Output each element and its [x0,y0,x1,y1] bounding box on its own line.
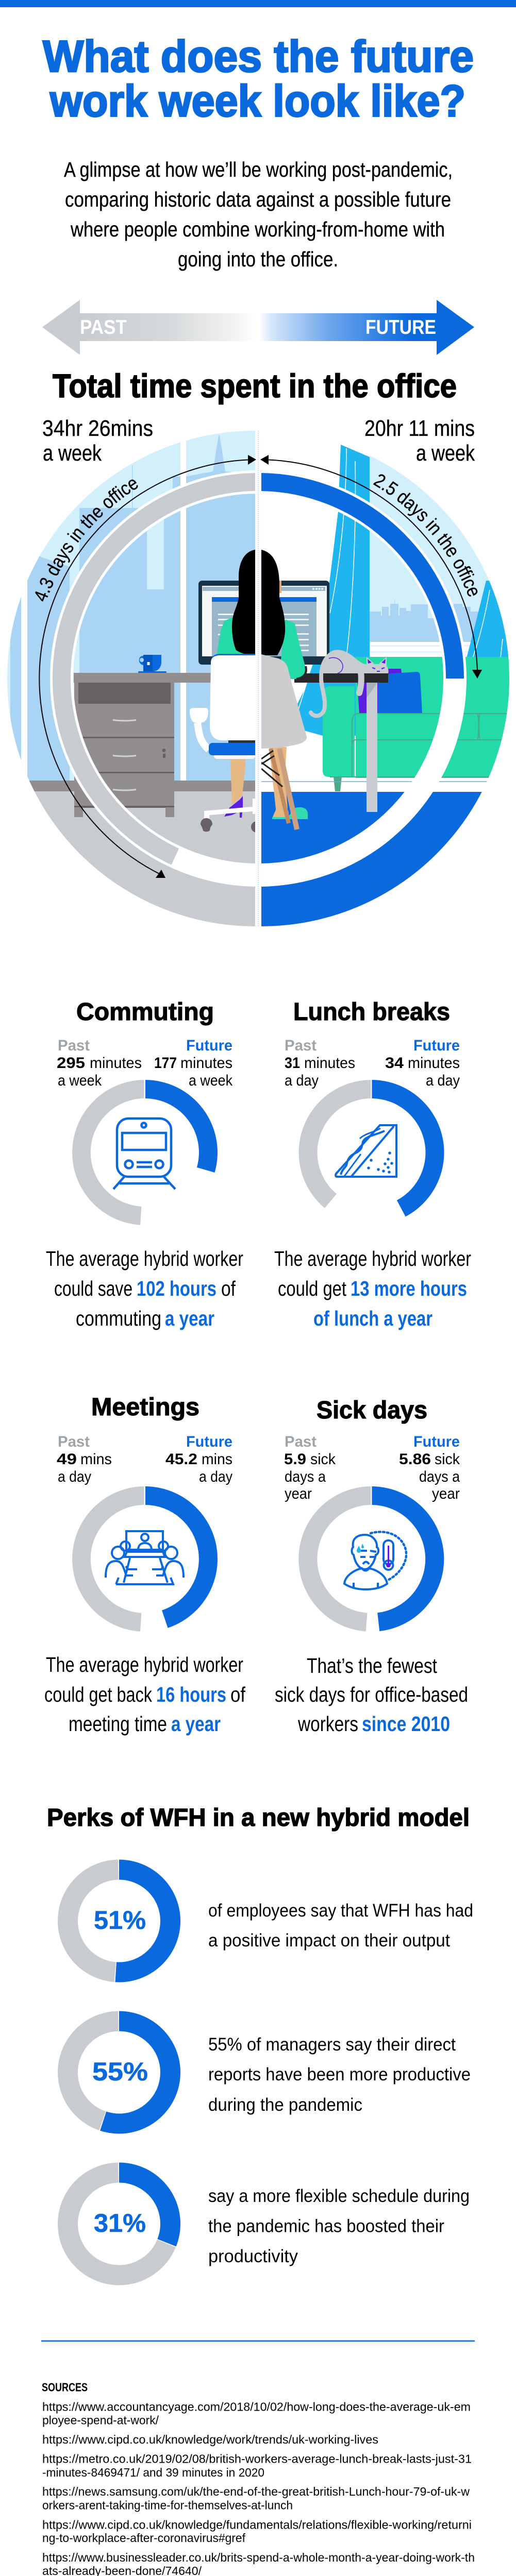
source links: https://www.cipd.co.uk/knowledge/work/trends/uk-working-lives [42,2433,378,2446]
future stat [165,1433,232,1485]
timeline arrow: past to future [42,300,474,355]
progress ring: future, 2.5 days [258,482,455,679]
past stat: a week [58,1072,102,1089]
source links: https://www.businessleader.co.uk/brits-spend-a-whole-month-a-year-doing-work-th [42,2551,475,2564]
label: future hours: 20hr 11 mins [364,416,475,441]
past stat: minutes [304,1055,355,1072]
panel: sick days [275,1397,468,1736]
past stat: a day [285,1072,319,1089]
hair [232,550,255,655]
body text: The average hybrid worker [46,1247,243,1270]
top bar [0,0,516,7]
past stat: a day [58,1468,91,1485]
donut [68,2173,170,2275]
perk: 51% [68,1870,473,1972]
arrow: past arc [39,455,256,878]
body text [44,1653,246,1736]
sources [42,2380,475,2576]
past stat: mins [80,1451,112,1468]
intro text: comparing historic data against a possible future [65,188,451,211]
future stat: minutes [180,1055,232,1072]
future stat [154,1037,233,1089]
description: reports have been more productive [208,2064,471,2084]
future stat: year [432,1485,460,1502]
past stat [285,1037,355,1089]
body text: a year [165,1307,214,1330]
body text: of [230,1683,246,1706]
sleeping cat [311,650,389,716]
sources heading: SOURCES [42,2380,88,2394]
arc label: 2.5 days: 2.5 days in the office [373,474,477,597]
body text: 16 hours [156,1683,226,1706]
arrow: future arc [260,455,482,679]
body text: That’s the fewest [307,1654,437,1677]
rug and floor [261,781,487,926]
body text [275,1654,468,1736]
desk top [74,673,218,683]
past stat: Past [285,1433,317,1450]
label: past hours [42,416,153,466]
heading: Sick days [317,1397,427,1424]
timeline arrow: past to future: FUTURE [365,316,436,338]
source links: https://metro.co.uk/2019/02/08/british-workers-average-lunch-break-lasts-just-31 [42,2452,472,2466]
future stat: mins [202,1451,232,1468]
past stat: Past [58,1433,90,1450]
illustration: home half (future) [258,428,516,933]
future stat: 45.2 [165,1451,197,1468]
perk: 31% [68,2173,470,2275]
intro text: going into the office. [178,247,338,271]
donut [298,1486,444,1632]
body text [274,1247,471,1330]
title: What does the future [43,32,474,81]
heading: perks: Perks of WFH in a new hybrid model [47,1804,470,1832]
title [43,32,474,126]
body text: The average hybrid worker [46,1653,243,1676]
description [208,2186,470,2266]
heading: Lunch breaks [293,998,450,1026]
description [208,2035,471,2115]
label: past hours: 34hr 26mins [42,416,153,441]
illustration: office half (past) [0,428,262,933]
description: the pandemic has boosted their [208,2216,444,2236]
skyline [370,600,487,642]
shirt [217,617,244,654]
past stat: 5.9 [284,1451,306,1468]
intro text [64,158,453,271]
past stat [284,1433,336,1502]
monitor [198,581,239,665]
donut [299,1080,444,1217]
future stat: a day [426,1072,460,1089]
source links: https://www.accountancyage.com/2018/10/02/how-long-does-the-average-uk-em [42,2400,471,2413]
body text: workers [297,1712,358,1736]
description: a positive impact on their output [208,1930,450,1951]
past stat: 49 [57,1451,77,1468]
donut [68,2021,170,2124]
donut [72,1486,218,1632]
label: future hours: a week [416,440,475,466]
office chair [190,654,258,759]
future stat: 34 [385,1055,404,1072]
body text: could save [54,1277,132,1300]
future stat: minutes [408,1055,460,1072]
icon: sandwich [336,1125,396,1177]
body text: commuting [76,1307,161,1330]
icon: sick person [344,1532,406,1589]
description: productivity [208,2246,298,2266]
past stat: minutes [90,1055,142,1072]
heading: Commuting [76,998,214,1026]
timeline arrow: past to future: PAST [80,316,127,338]
panel: lunch breaks [274,998,471,1330]
icon: meeting room [106,1531,184,1584]
woman: chair, shirt, hair [261,550,308,829]
future stat: 177 [154,1055,177,1072]
source links: https://www.cipd.co.uk/knowledge/fundamentals/relations/flexible-working/returni [42,2518,472,2531]
heading: Meetings [91,1394,199,1421]
future stat [385,1037,460,1089]
source links: orkers-arent-taking-time-for-themselves-at-lunch [42,2499,293,2512]
body text: since 2010 [362,1712,450,1736]
future stat [399,1433,460,1502]
intro text: where people combine working-from-home with [70,217,445,241]
sofa [323,657,510,791]
curtains [294,445,510,736]
body text: 102 hours [137,1277,217,1300]
body text: could get [278,1277,346,1300]
percentage: 55% [92,2057,148,2086]
arc label: 4.3 days: 4.3 days in the office [35,479,138,602]
body text: sick days for office-based [275,1683,468,1706]
description: say a more flexible schedule during [208,2186,470,2206]
past stat: days a [285,1468,326,1485]
cabinet [74,682,174,817]
source links: -minutes-8469471/ and 39 minutes in 2020 [42,2466,264,2479]
description: of employees say that WFH has had [208,1901,473,1921]
future stat: 5.86 [399,1451,431,1468]
white band behind the progress rings [62,482,455,875]
percentage: 51% [94,1906,146,1935]
percentage: 31% [94,2209,146,2238]
future stat: Future [413,1433,460,1450]
label: past hours: a week [43,440,102,466]
progress ring: past, 4.3 days [61,482,258,857]
coffee mug [138,655,167,673]
panel: meetings [44,1394,246,1736]
description: 55% of managers say their direct [208,2035,456,2055]
donut [72,1080,218,1225]
window sill [370,642,471,657]
body text: of [221,1277,236,1300]
past stat: year [285,1485,312,1502]
body text: meeting time [69,1712,167,1736]
future stat: Future [186,1037,232,1054]
perk: 55% [68,2021,471,2124]
donut [68,1870,170,1972]
body text: a year [171,1712,221,1736]
source links: https://news.samsung.com/uk/the-end-of-the-great-british-Lunch-hour-79-of-uk-w [42,2485,470,2498]
future stat: a week [189,1072,233,1089]
past stat: Past [58,1037,90,1054]
body text: 13 more hours [351,1277,467,1300]
description [208,1901,473,1951]
future stat: sick [435,1451,460,1468]
monitor [266,581,329,665]
future stat: days a [419,1468,460,1485]
past stat: sick [310,1451,336,1468]
dotted centre line [258,431,259,926]
future stat: a day [199,1468,232,1485]
source links [42,2400,475,2576]
panel: commuting [46,998,243,1330]
body text: could get back [44,1683,152,1706]
source links: ployee-spend-at-work/ [42,2413,159,2427]
past stat [57,1433,112,1485]
title: work week look like? [49,76,465,126]
past stat: Past [285,1037,317,1054]
past stat [57,1037,142,1089]
body text: of lunch a year [313,1307,432,1330]
icon: train [113,1118,175,1189]
past stat: 295 [57,1055,85,1072]
desk and leg [294,673,388,812]
body text [46,1247,243,1330]
leg and heel [201,759,255,833]
intro text: A glimpse at how we’ll be working post-pandemic, [64,158,453,181]
source links: ng-to-workplace-after-coronavirus#gref [42,2531,246,2545]
future stat: Future [186,1433,232,1450]
past stat: 31 [285,1055,300,1072]
heading: total time in the office: Total time spent in the office [53,367,457,404]
description: during the pandemic [208,2095,362,2115]
label: future hours [364,416,475,466]
future stat: Future [413,1037,460,1054]
